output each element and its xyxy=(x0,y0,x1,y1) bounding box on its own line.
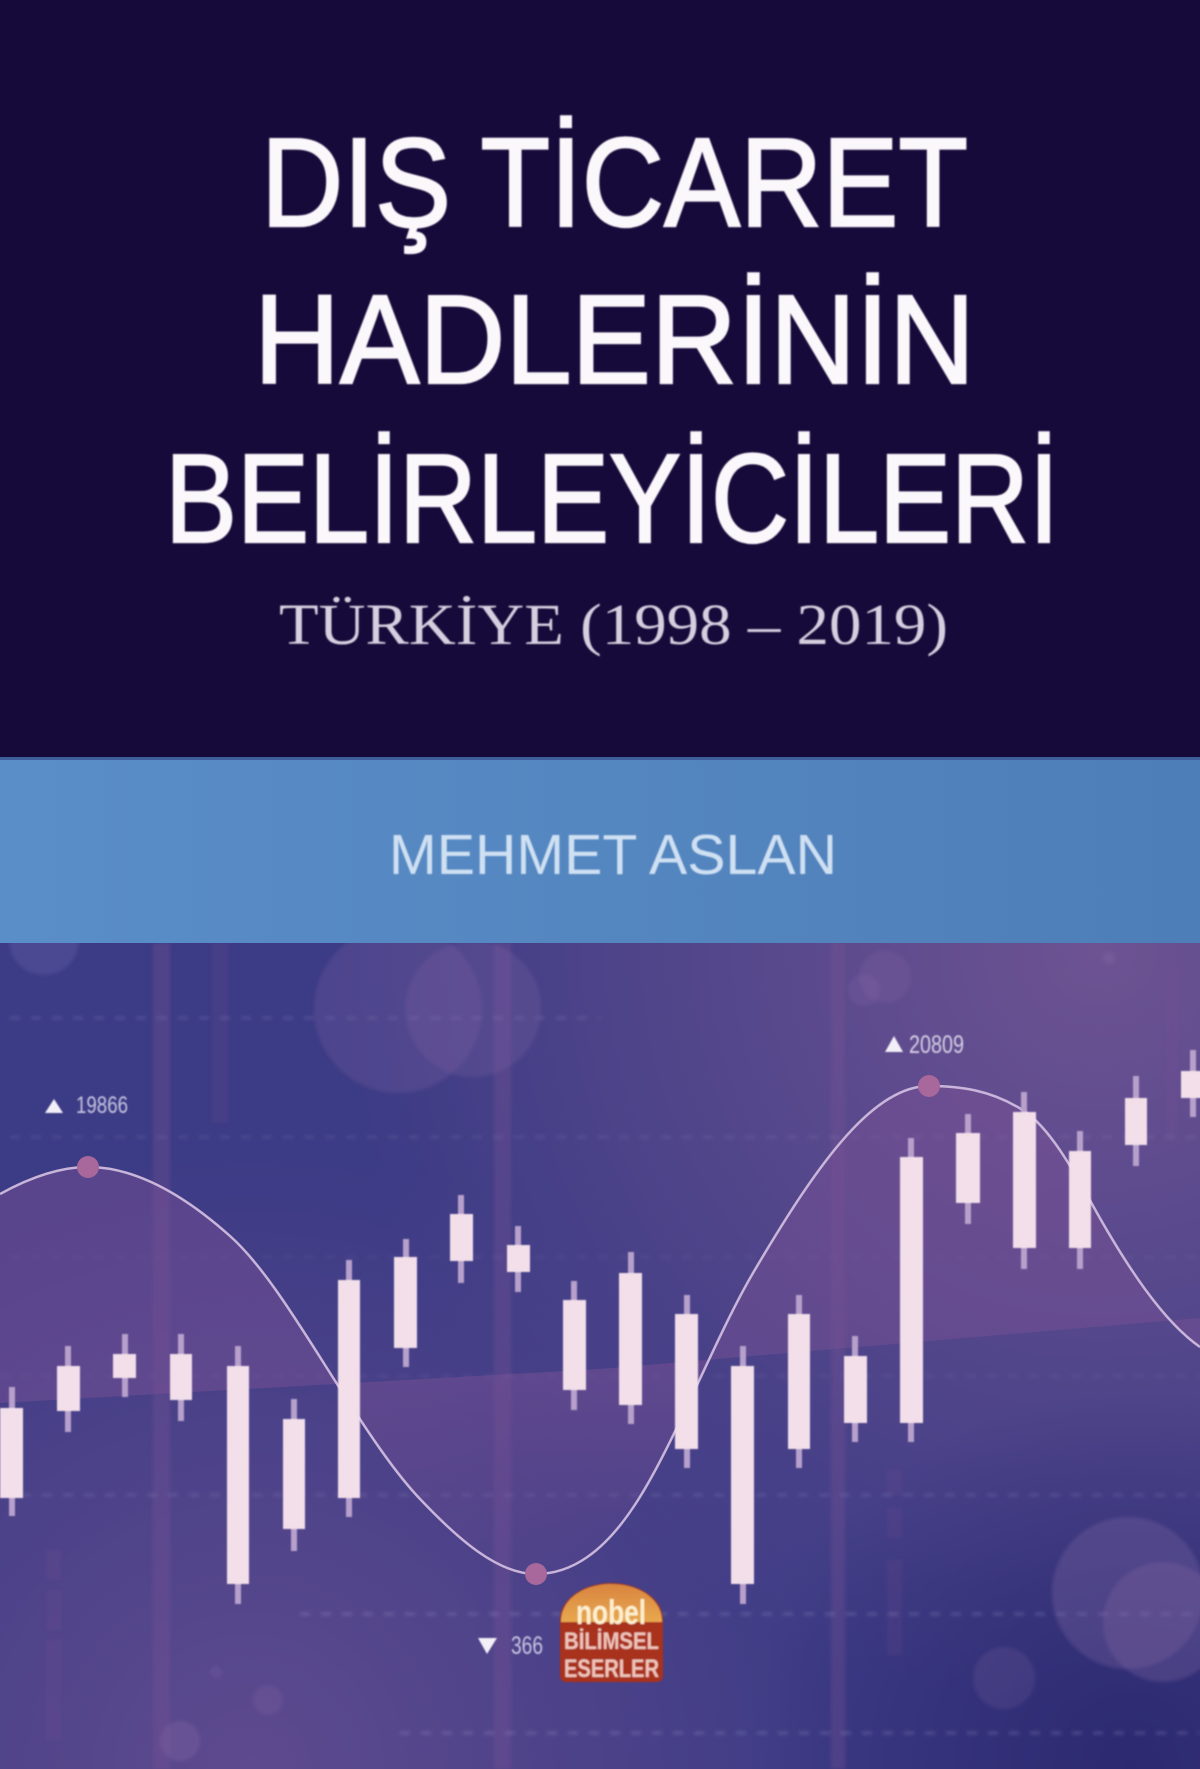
label: trough 366 xyxy=(478,1632,543,1660)
icon: publisher logo: ESERLER xyxy=(564,1655,659,1683)
subtitle: TÜRKİYE (1998 – 2019) xyxy=(279,592,948,657)
icon: publisher logo: BİLİMSEL xyxy=(564,1628,659,1655)
title line 2: HADLERİNİN xyxy=(254,269,975,410)
icon: publisher logo: nobel xyxy=(576,1594,646,1632)
label: peak 20809 xyxy=(885,1031,964,1059)
title line 3: BELİRLEYİCİLERİ xyxy=(165,428,1059,569)
author name: MEHMET ASLAN xyxy=(389,823,837,887)
label: peak 19866 xyxy=(45,1092,128,1119)
title xyxy=(165,112,1059,569)
panel: dark title background xyxy=(0,0,1200,757)
candlestick chart xyxy=(0,1050,1200,1604)
label: peak 20809: 20809 xyxy=(909,1031,964,1059)
panel: shaded area between curve and trend line xyxy=(0,1086,1200,1574)
panel: chart background xyxy=(0,905,1200,1769)
label: trough 366: 366 xyxy=(511,1632,543,1660)
line curve xyxy=(0,1086,1200,1574)
curve markers xyxy=(77,1075,940,1585)
icon: publisher logo xyxy=(560,1583,663,1683)
label: peak 19866: 19866 xyxy=(76,1092,128,1119)
title line 1: DIŞ TİCARET xyxy=(261,112,968,253)
panel: author band xyxy=(0,757,1200,943)
